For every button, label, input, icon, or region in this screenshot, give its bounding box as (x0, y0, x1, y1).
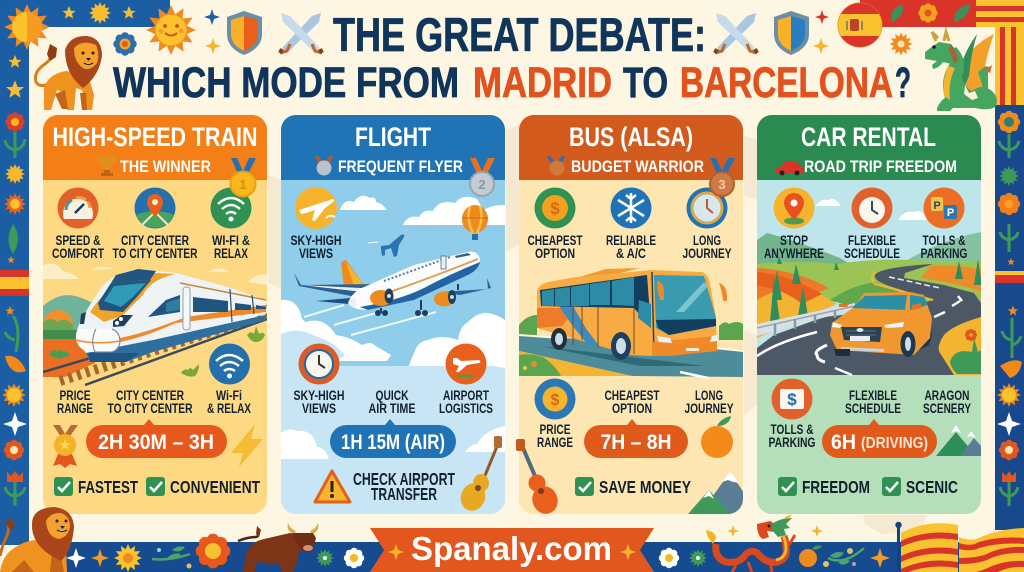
labels: flight: VIEWS (302, 401, 336, 416)
header band: train: HIGH-SPEED TRAIN (52, 122, 258, 152)
icon: guitar (457, 436, 502, 514)
panel: car rental (757, 115, 982, 514)
illustration: road scene (519, 315, 743, 378)
medal gold (53, 425, 78, 468)
icon: sky-high views (295, 187, 337, 229)
duration pill: 2H 30M – 3H (98, 431, 214, 454)
labels: train top (52, 233, 250, 261)
duration pill: 7H – 8H (600, 431, 672, 454)
icon: parking: P (933, 200, 941, 212)
header band: car: ROAD TRIP FREEDOM (804, 157, 957, 176)
green dragon (925, 32, 997, 111)
medal 3 coin: 3 (718, 177, 726, 192)
title (113, 8, 911, 107)
clouds (815, 199, 928, 220)
labels: flight: SKY-HIGH (290, 233, 342, 248)
header band: bus: BUDGET WARRIOR (571, 157, 704, 176)
icon: clock (298, 344, 340, 384)
icon: orange flower (890, 32, 912, 56)
check items: SCENIC (906, 477, 958, 497)
icon: tolls (772, 378, 812, 420)
red dragon bottom (706, 514, 795, 572)
left border (0, 0, 170, 545)
Catalan flag bottom (895, 522, 1024, 572)
labels: car lower: SCHEDULE (845, 401, 901, 416)
icon: price: $ (551, 392, 560, 409)
labels: bus top: OPTION (535, 246, 575, 261)
labels: bus lower: JOURNEY (684, 401, 734, 416)
duration pill (330, 419, 456, 458)
title: TO (623, 59, 668, 107)
header band: car: CAR RENTAL (801, 122, 936, 152)
icon: speedometer (58, 188, 98, 228)
sparkles (204, 9, 221, 54)
labels: bus top: CHEAPEST (528, 233, 583, 248)
icon: lightning (231, 424, 263, 467)
train body (76, 269, 267, 362)
duration pill: 1H 15M (AIR) (341, 431, 445, 454)
header band: bus (519, 115, 743, 180)
labels: flight: SKY-HIGH (294, 388, 344, 403)
icon: mountains (936, 425, 981, 456)
duration pill (86, 419, 227, 458)
medal 2 ribbon (470, 158, 495, 176)
duration pill: 6H (831, 431, 856, 454)
labels: train lower (57, 388, 251, 416)
labels: flight (290, 233, 493, 416)
panel: bus (516, 115, 750, 517)
sky and clouds (281, 180, 505, 514)
title: WHICH MODE FROM (113, 59, 459, 107)
labels: bus lower: CHEAPEST (604, 388, 660, 403)
labels: flight: LOGISTICS (439, 401, 493, 416)
labels: train lower: & RELAX (207, 401, 251, 416)
sparkles right (813, 10, 829, 54)
duration pill: (DRIVING) (861, 435, 928, 452)
icon: shield left (227, 11, 262, 55)
check items: CONVENIENT (170, 477, 260, 497)
header band: flight (281, 115, 505, 180)
labels: bus top: JOURNEY (682, 246, 732, 261)
labels: car top: STOP (780, 233, 808, 248)
check items: FASTEST (78, 477, 138, 497)
title: ? (895, 59, 911, 107)
lion top left (35, 36, 102, 110)
icon: wifi blue (209, 344, 250, 384)
sparkles over bottom band (727, 525, 823, 537)
check items: FREEDOM (802, 477, 870, 497)
panel: high-speed train (43, 115, 267, 514)
title: BARCELONA (680, 59, 893, 107)
icon: cheapest: $ (550, 199, 560, 218)
labels: car lower (768, 388, 971, 450)
labels: bus top: RELIABLE (606, 233, 656, 248)
panel: flight (281, 115, 505, 514)
car (830, 292, 932, 357)
labels: train lower: PRICE (60, 388, 90, 403)
header band: flight: FREQUENT FLYER (338, 157, 463, 176)
warning text: CHECK AIRPORT (353, 469, 455, 489)
labels: train lower: CITY CENTER (116, 388, 184, 403)
duration pill (584, 419, 688, 458)
labels: car top: SCHEDULE (844, 246, 900, 261)
site banner (370, 528, 654, 572)
labels: car lower: TOLLS & (770, 422, 814, 437)
header band: car (757, 115, 981, 180)
labels: train top: TO CITY CENTER (112, 246, 198, 261)
medal 2 coin: 2 (478, 177, 486, 192)
icon: orange fruit (701, 416, 733, 458)
title: THE GREAT DEBATE: (333, 8, 706, 61)
labels: bus top (528, 233, 732, 261)
medal 3 coin (710, 172, 734, 196)
icon: parking: P (947, 207, 954, 219)
labels: flight: QUICK (376, 388, 409, 403)
labels: car top: TOLLS & (922, 233, 966, 248)
flower bottom (196, 534, 230, 568)
hot-air balloon (462, 205, 488, 240)
icon: snowflake (610, 188, 652, 228)
icon: warning (315, 471, 350, 502)
illustration: airplane (294, 252, 491, 316)
labels: car lower: FLEXIBLE (849, 388, 897, 403)
icon: price (534, 378, 576, 420)
labels: train top: WI-FI & (212, 233, 250, 248)
check item: SAVE MONEY (599, 477, 691, 497)
icon: mountains (688, 472, 743, 514)
icon: shield right (774, 11, 809, 55)
icon: cheapest (534, 188, 576, 228)
labels: car lower: PARKING (768, 435, 816, 450)
medal 1 (231, 158, 256, 176)
labels: train lower: RANGE (57, 401, 93, 416)
labels: train top: SPEED & (56, 233, 101, 248)
illustration: train (43, 264, 267, 385)
icon: crossed swords left (280, 13, 322, 53)
bottom border (60, 542, 1000, 572)
labels: car lower: ARAGON (924, 388, 970, 403)
icon: guitar (516, 439, 562, 517)
site banner: Spanaly.com (411, 530, 612, 567)
icon: small flower (113, 32, 137, 56)
labels: flight: AIR TIME (368, 401, 416, 416)
illustration: scenery and road (757, 180, 982, 375)
icon: wifi green (210, 188, 252, 228)
duration pill (822, 419, 937, 458)
icon: stop pin (774, 188, 814, 228)
labels: bus top: & A/C (616, 246, 646, 261)
labels: car lower: SCENERY (923, 401, 971, 416)
small plane (368, 234, 404, 257)
icon: tolls: $ (787, 390, 797, 409)
icon: Spanish flag badge (838, 2, 882, 48)
labels: train top: CITY CENTER (121, 233, 189, 248)
icon: calendar clock (852, 188, 892, 228)
icon: small bushes (181, 326, 265, 377)
icon: smiling sun (146, 5, 196, 55)
header band: flight: FLIGHT (355, 122, 431, 152)
labels: bus lower: PRICE (540, 422, 570, 437)
header band: train: THE WINNER (120, 157, 211, 176)
icon: crossed swords right (715, 13, 757, 53)
labels: train lower: Wi-Fi (216, 388, 242, 403)
check items (778, 477, 958, 497)
labels: car top: FLEXIBLE (848, 233, 896, 248)
labels: car top: ANYWHERE (764, 246, 824, 261)
labels: flight: VIEWS (299, 246, 333, 261)
check item (575, 477, 691, 497)
medal 1 coin (230, 172, 256, 196)
warning text (353, 469, 455, 504)
check items (54, 477, 260, 497)
icon: bull (238, 523, 318, 572)
labels: bus lower (537, 388, 734, 450)
labels: bus lower: LONG (695, 388, 723, 403)
labels: train top: RELAX (214, 246, 248, 261)
header band: bus: BUS (ALSA) (569, 122, 693, 152)
labels: flight: AIRPORT (443, 388, 490, 403)
header band: train (43, 115, 267, 180)
medal 1 coin: 1 (239, 177, 247, 192)
labels: train lower: TO CITY CENTER (108, 401, 193, 416)
icon: airport logistics (446, 344, 486, 384)
icon: city pin (134, 188, 176, 228)
medal 3 ribbon (710, 158, 735, 176)
lion bottom left (0, 507, 74, 572)
bus (537, 268, 727, 360)
labels: car top (764, 233, 968, 261)
labels: train top: COMFORT (52, 246, 105, 261)
labels: bus top: LONG (693, 233, 721, 248)
faint map background (268, 125, 927, 534)
icon: long journey clock (686, 188, 728, 228)
icon: parking (924, 188, 964, 228)
labels: bus lower: RANGE (537, 435, 573, 450)
medal 2 coin (470, 172, 494, 196)
right border and top flag strip (860, 0, 1024, 530)
title: MADRID (473, 59, 612, 107)
labels: bus lower: OPTION (612, 401, 652, 416)
warning text: TRANSFER (371, 484, 437, 504)
labels: car top: PARKING (920, 246, 968, 261)
